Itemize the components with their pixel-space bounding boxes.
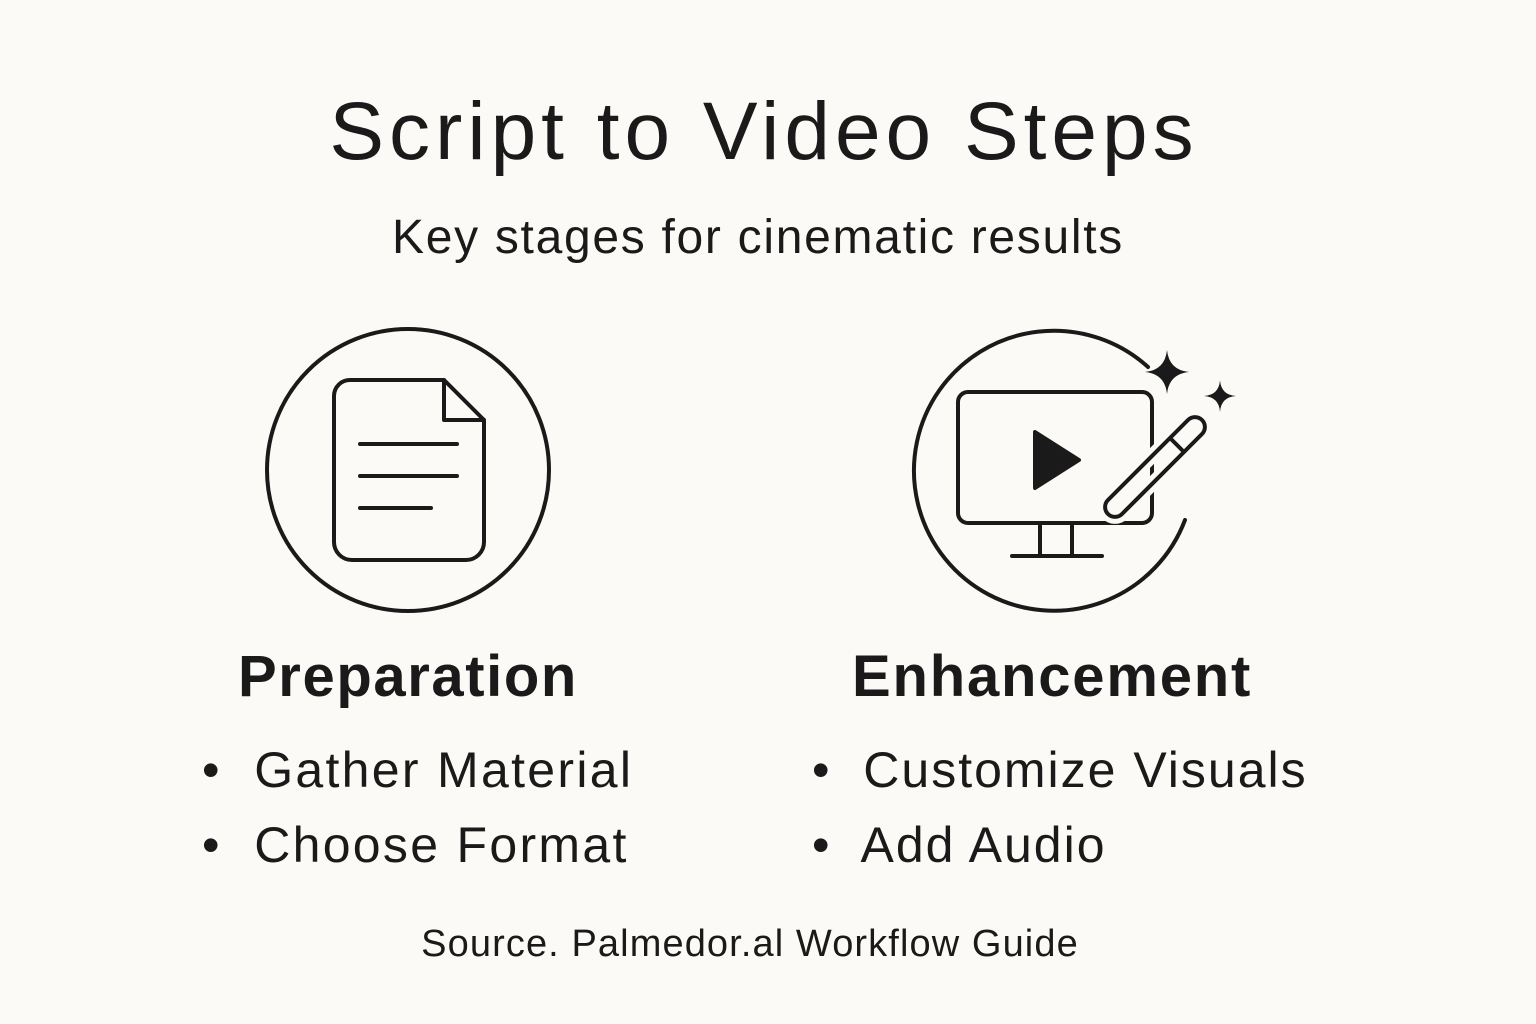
list: preparation: • Gather Material (202, 742, 633, 798)
title: Script to Video Steps (329, 86, 1199, 177)
list: enhancement: • Customize Visuals (812, 742, 1308, 798)
source: Source. Palmedor.al Workflow Guide (421, 923, 1079, 965)
list: preparation: • Choose Format (202, 817, 629, 873)
subtitle: Key stages for cinematic results (392, 211, 1124, 264)
list: enhancement (812, 742, 1308, 873)
heading: Preparation: Preparation (238, 644, 578, 709)
list: enhancement: • Add Audio (812, 817, 1107, 873)
list: preparation (202, 742, 633, 873)
heading: Enhancement: Enhancement (852, 644, 1252, 709)
